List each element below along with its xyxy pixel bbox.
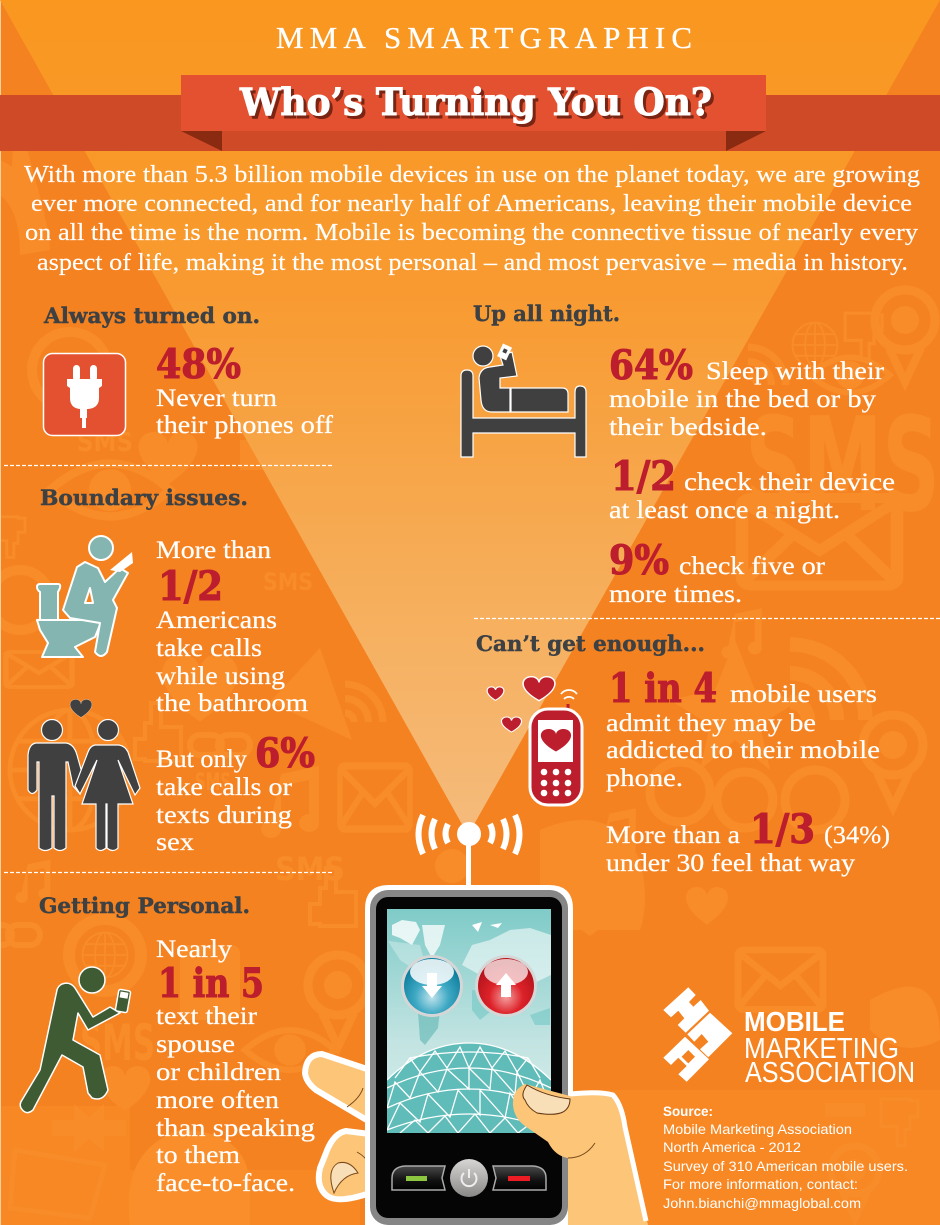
panel: always turned on: Never turn	[156, 383, 277, 412]
source credits	[663, 1103, 908, 1211]
heading: MMA Smartgraphic: MMA SMARTGRAPHIC	[276, 20, 692, 55]
phone illustration	[365, 885, 573, 1225]
panel: boundary issues: 1/2	[158, 563, 223, 610]
panel: can't get enough: 1 in 4	[609, 665, 717, 712]
panel: boundary issues: More than	[156, 535, 271, 564]
red upload button	[475, 955, 537, 1017]
icon: person in bed	[461, 343, 586, 457]
icon: antenna signal	[418, 815, 520, 888]
source credits: North America - 2012	[663, 1139, 801, 1155]
panel: can't get enough: under 30 feel that way	[606, 848, 855, 877]
panel: up all night: Up all night.	[473, 301, 620, 326]
panel: boundary issues: take calls	[156, 633, 262, 662]
panel: always turned on	[43, 303, 334, 439]
panel: up all night: mobile in the bed or by	[609, 384, 876, 413]
panel: can't get enough: (34%)	[824, 820, 890, 849]
panel: up all night: their bedside.	[609, 412, 767, 441]
source credits: John.bianchi@mmaglobal.com	[663, 1195, 861, 1211]
background pattern of mobile icons: SMS	[80, 1014, 155, 1072]
panel: can't get enough: 1/3	[750, 806, 815, 853]
panel: getting personal	[20, 893, 315, 1197]
intro paragraph: ever more connected, and for nearly half of Americans, leaving their mobile device	[31, 191, 912, 217]
source credits: Mobile Marketing Association	[663, 1121, 852, 1137]
panel: getting personal: or children	[156, 1057, 281, 1086]
logo: Mobile Marketing Association: MARKETING	[744, 1033, 899, 1065]
panel: boundary issues: take calls or	[156, 772, 293, 801]
panel: up all night: at least once a night.	[609, 495, 840, 524]
panel: getting personal: text their	[156, 1001, 258, 1030]
panel: can't get enough: phone.	[606, 763, 683, 792]
panel: boundary issues	[28, 485, 315, 856]
panel: up all night: 9%	[609, 537, 669, 584]
panel: boundary issues: Boundary issues.	[40, 485, 248, 510]
phone screen	[387, 909, 551, 1133]
source credits: For more information, contact:	[663, 1176, 858, 1192]
icon: hand and thumb over phone	[513, 1084, 648, 1225]
panel: getting personal: 1 in 5	[158, 960, 264, 1007]
panel: boundary issues: Americans	[156, 605, 277, 634]
panel: boundary issues: 6%	[255, 730, 315, 777]
panel: up all night	[461, 301, 895, 608]
panel: getting personal: more often	[156, 1085, 279, 1114]
background pattern of mobile icons: SMS	[195, 768, 231, 796]
panel: always turned on: 48%	[156, 341, 241, 388]
panel: getting personal: than speaking	[156, 1113, 315, 1142]
source credits: Source:	[663, 1103, 713, 1119]
intro paragraph	[24, 162, 920, 276]
panel: can't get enough: addicted to their mobile	[606, 735, 880, 764]
logo: Mobile Marketing Association: ASSOCIATION	[745, 1057, 915, 1089]
icon: walking man texting	[20, 967, 131, 1113]
panel: boundary issues: But only	[156, 744, 247, 773]
icon: couple with heart	[28, 699, 140, 850]
panel: can't get enough: Can’t get enough...	[476, 631, 705, 656]
panel: can't get enough: admit they may be	[606, 708, 816, 737]
logo: Mobile Marketing Association	[663, 987, 915, 1089]
blue download button	[401, 955, 463, 1017]
background pattern of mobile icons: SMS	[77, 428, 133, 458]
panel: can't get enough	[476, 631, 890, 877]
panel: up all night: check five or	[679, 551, 826, 580]
background pattern of mobile icons: SMS	[275, 850, 345, 888]
panel: always turned on: Always turned on.	[43, 303, 260, 328]
light cone from antenna	[0, 0, 940, 835]
icon: plug	[44, 354, 126, 436]
panel: boundary issues: the bathroom	[156, 688, 308, 717]
panel: getting personal: Getting Personal.	[39, 893, 250, 918]
title: Who’s Turning You On?	[239, 80, 712, 124]
panel: up all night: 1/2	[611, 453, 676, 500]
panel: always turned on: their phones off	[156, 410, 334, 439]
panel: up all night: more times.	[609, 579, 742, 608]
intro paragraph: on all the time is the norm. Mobile is becoming the connective tissue of nearly every	[25, 220, 918, 246]
phone buttons	[392, 1159, 546, 1197]
logo: Mobile Marketing Association: MOBILE	[744, 1006, 845, 1037]
source credits: Survey of 310 American mobile users.	[663, 1158, 908, 1174]
title ribbon	[0, 75, 940, 151]
panel: getting personal: to them	[156, 1140, 240, 1169]
background pattern of mobile icons: SMS	[263, 568, 313, 596]
icon: hearts and phone	[487, 677, 582, 805]
panel: boundary issues: sex	[156, 827, 194, 856]
panel: getting personal: face-to-face.	[156, 1168, 295, 1197]
intro paragraph: With more than 5.3 billion mobile devices in use on the planet today, we are growing	[24, 162, 920, 188]
panel: up all night: Sleep with their	[706, 356, 885, 385]
intro paragraph: aspect of life, making it the most personal – and most pervasive – media in history.	[37, 250, 908, 276]
panel: getting personal: Nearly	[156, 934, 232, 963]
panel: boundary issues: while using	[156, 661, 285, 690]
panel: up all night: check their device	[684, 467, 895, 496]
icon: fingers behind phone	[305, 1054, 370, 1199]
panel: can't get enough: More than a	[606, 820, 740, 849]
panel: can't get enough: mobile users	[730, 679, 877, 708]
panel: up all night: 64%	[609, 342, 693, 389]
geodesic dome	[387, 1043, 551, 1133]
icon: person on toilet	[37, 536, 133, 657]
panel: getting personal: spouse	[156, 1029, 235, 1058]
logo mark	[663, 987, 732, 1082]
panel: boundary issues: texts during	[156, 800, 292, 829]
world map	[388, 920, 551, 1045]
